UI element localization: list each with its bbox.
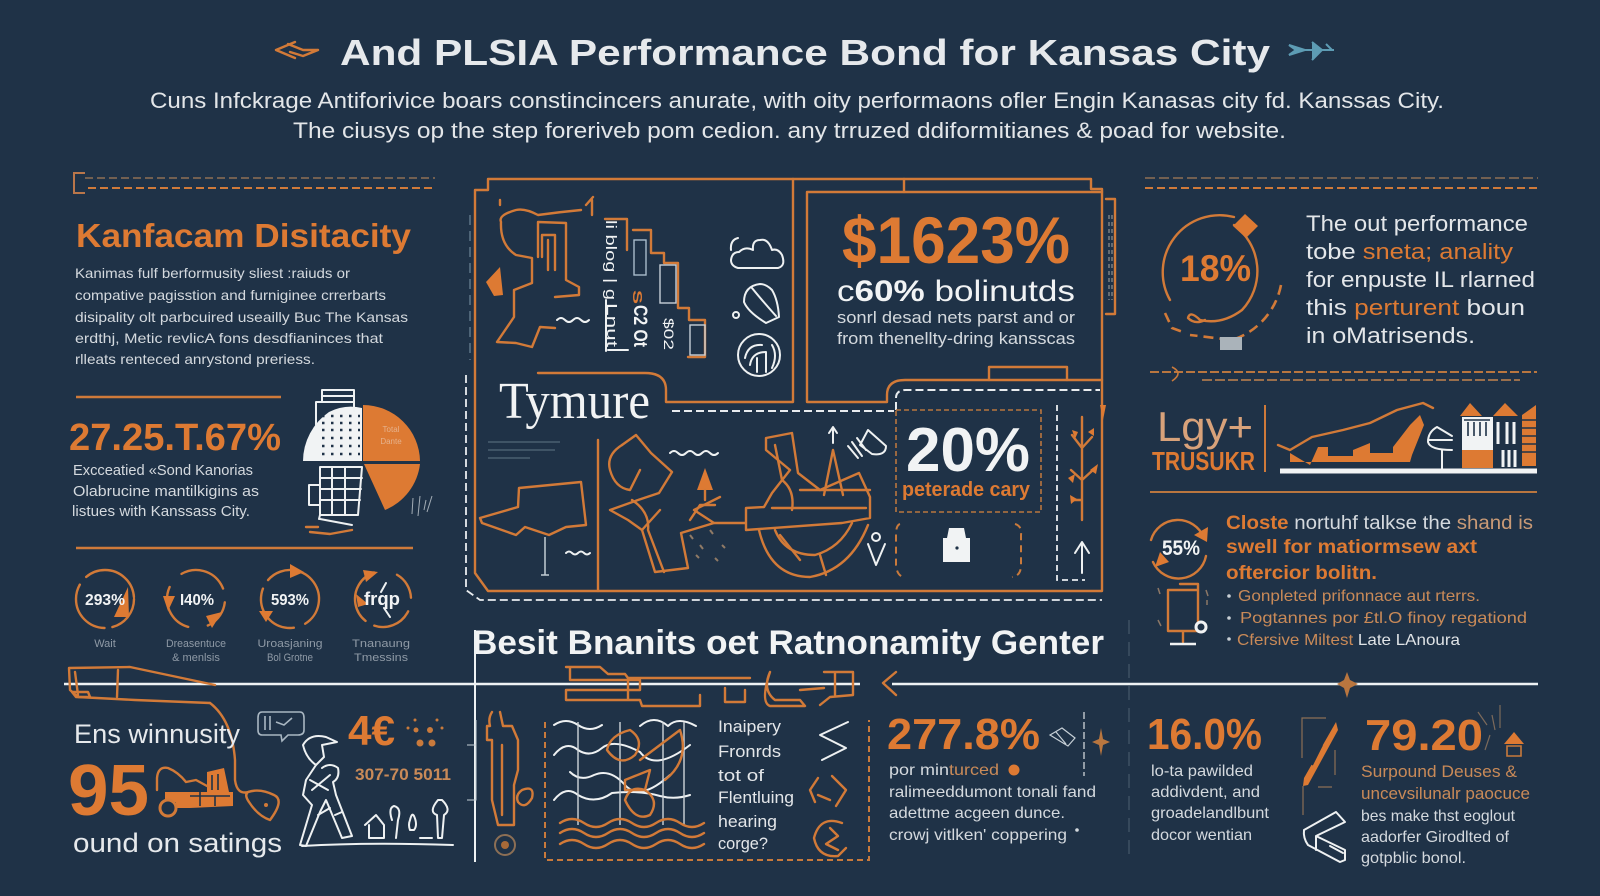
callout: 20%: peterade cary xyxy=(902,479,1031,501)
icon: up arrow xyxy=(1075,542,1089,573)
body text: erdthj, Metic revlicA fons desdfianinces that xyxy=(75,330,383,346)
stat caption xyxy=(837,275,1075,348)
bracket and dashes xyxy=(74,173,435,193)
description 2: lo-ta pawilded xyxy=(1151,763,1253,780)
description 1 xyxy=(889,762,1096,844)
stat: 95: 95 xyxy=(68,751,149,831)
text block: performance: this perturent boun xyxy=(1306,295,1525,320)
ring 4: Tmessins xyxy=(354,652,409,664)
icon: hand xyxy=(848,430,886,458)
bullet list xyxy=(1227,588,1527,649)
illustration: data columns: li blog | g xyxy=(602,220,619,300)
ring 1: Wait xyxy=(94,638,116,650)
panel: right column xyxy=(1145,178,1538,649)
text block: performance: tobe sneta; anality xyxy=(1306,239,1513,264)
ring 3: 593% xyxy=(271,592,309,609)
section heading: Besit Bnanits: Besit Bnanits oet Ratnonamity Genter xyxy=(472,624,1104,662)
ring 4: Tnanaung xyxy=(352,638,410,650)
text list: tot of xyxy=(718,766,764,785)
illustration: data columns: S xyxy=(630,290,645,305)
panel: left column xyxy=(69,173,435,664)
illustration: wave chart xyxy=(545,720,869,860)
illustration: walking figure xyxy=(300,736,453,846)
stat caption: sonrl desad nets parst and or xyxy=(837,308,1075,327)
description 1: adettme acgeen dunce. xyxy=(889,805,1065,822)
panel: bottom stats xyxy=(887,705,1530,867)
icon: lock xyxy=(896,524,1021,577)
icon: white bracket shape xyxy=(1304,812,1345,862)
decoration dots xyxy=(406,718,444,746)
subtitle xyxy=(150,88,1444,143)
text block: performance: The out performance xyxy=(1306,211,1528,236)
description 2: groadelandlbunt xyxy=(1151,805,1270,822)
callout: 20%: 20% xyxy=(906,416,1030,485)
stat description: Excceatied «Sond Kanorias xyxy=(73,463,253,479)
icon: plant xyxy=(1068,405,1106,520)
illustration: data columns: $02 xyxy=(661,318,677,350)
illustration: tool and cord xyxy=(69,667,279,820)
bullet list: Gonpleted prifonnace aut rterrs. xyxy=(1238,588,1480,605)
icon: small hand xyxy=(1050,728,1075,746)
panel: central frame xyxy=(466,179,1115,600)
text block: closing: Closte nortuhf talkse the shand is xyxy=(1226,513,1533,534)
icon: left chevrons xyxy=(276,42,318,58)
stat caption: from thenellty-dring kansscas xyxy=(837,329,1075,348)
text block: closing xyxy=(1226,513,1533,584)
description 2: docor wentian xyxy=(1151,827,1252,844)
description 3: bes make thst eoglout xyxy=(1361,808,1516,825)
stat: 4€: 4€ xyxy=(348,707,395,754)
inner dividers xyxy=(466,179,1115,600)
stat: 277.8%: 277.8% xyxy=(887,710,1040,759)
ring 4 xyxy=(345,561,421,664)
text list: Flentluing xyxy=(718,788,794,807)
orange subhead: Surpound Deuses & xyxy=(1361,762,1518,781)
stat caption: c60% bolinutds xyxy=(837,275,1075,308)
logo: LGY+ TRUSUKR xyxy=(1152,403,1255,476)
ring stat: 18% xyxy=(1163,214,1281,350)
text list: Inaipery xyxy=(718,717,782,736)
label: ound on satings: ound on satings xyxy=(73,828,282,858)
ring 2: & menlsis xyxy=(172,652,220,664)
ring 2 xyxy=(156,559,236,664)
text block: closing: swell for matiormsew axt xyxy=(1226,537,1478,558)
stat: 79.20: 79.20 xyxy=(1365,711,1483,760)
ring 2: I40% xyxy=(180,592,214,609)
logo: LGY+ TRUSUKR: TRUSUKR xyxy=(1152,446,1255,476)
pie chart illustration xyxy=(303,390,432,534)
middle dashes xyxy=(1150,367,1537,381)
description 1: por min turced xyxy=(889,762,999,779)
panel: bottom centre xyxy=(467,667,869,860)
ring 4: frqp xyxy=(364,589,400,609)
icon: star xyxy=(1092,728,1110,756)
icon: pen xyxy=(1302,718,1338,815)
icon: right arrow xyxy=(1289,42,1334,60)
description 2 xyxy=(1151,763,1270,844)
illustration: data columns: Lnut xyxy=(603,303,620,348)
pie chart illustration: Total xyxy=(383,425,400,434)
description 1: crowj vitlken' coppering xyxy=(889,827,1067,844)
top dashes xyxy=(1145,178,1538,188)
icon: vehicle xyxy=(157,768,233,816)
orange subhead: uncevsilunalr paocuce xyxy=(1361,784,1530,803)
heading: Kanfacam Disitacity xyxy=(76,217,412,254)
ring stat: 18%: 18% xyxy=(1180,248,1251,289)
illustration: data columns xyxy=(602,219,705,357)
header xyxy=(150,32,1444,143)
callout: 20% xyxy=(896,410,1041,512)
body text: Kanimas fulf berformusity sliest :raiuds or xyxy=(75,265,350,281)
illustration: lower map line art xyxy=(480,433,870,577)
illustration: tool xyxy=(467,712,533,855)
outer frame xyxy=(475,179,1102,591)
icon: device xyxy=(1158,584,1208,644)
icon: small up arrow xyxy=(829,427,837,443)
ring stat: 55% xyxy=(1151,520,1208,579)
text list: Fronrds xyxy=(718,742,781,761)
ring 1: 293% xyxy=(85,592,125,609)
icon: location pin xyxy=(868,533,885,565)
text list: corge? xyxy=(718,834,768,853)
icons: column xyxy=(810,722,848,856)
icon: cloud xyxy=(731,238,783,268)
icon: speech bubble xyxy=(258,712,304,741)
body text: rlleats renteced anrystond preriess. xyxy=(75,351,315,367)
bottom rule xyxy=(64,630,1538,862)
icon: globe xyxy=(738,334,780,376)
panel: bottom left xyxy=(68,667,453,858)
stat description xyxy=(72,463,259,520)
phone number: 307-70 5011 xyxy=(355,765,451,784)
icon: target xyxy=(733,284,779,323)
description 3: gotpblic bonol. xyxy=(1361,850,1466,867)
subtitle: Cuns Infckrage Antiforivice boars constincincers anurate, with oity performaons ofler Engin Kanasas city fd. Kanssas City. xyxy=(150,88,1444,113)
label: Ens winnusity: Ens winnusity xyxy=(74,719,240,749)
description 1: ralimeeddumont tonali fand xyxy=(889,784,1096,801)
stat description: listues with Kanssass City. xyxy=(72,504,250,520)
illustration: skyline xyxy=(1278,403,1537,472)
ring 3: Bol Grotne xyxy=(267,652,313,664)
ring 2: Dreasentuce xyxy=(166,638,226,650)
serif heading: Tymure: Tymure xyxy=(499,373,650,430)
icon: small house xyxy=(1478,705,1524,756)
ring 3: Uroasjaning xyxy=(258,638,322,650)
description 3: aadorfer Girodlted of xyxy=(1361,829,1510,846)
illustration: map line art xyxy=(486,197,593,347)
stat: $1623%: $1623% xyxy=(842,203,1070,277)
illustration: data columns: C2 Ot xyxy=(629,305,650,348)
body text: compative pagisstion and furniginee crrerbarts xyxy=(75,287,386,303)
text block: closing: oftercior bolitn. xyxy=(1226,563,1377,584)
faint column divider xyxy=(1128,620,1130,860)
subtitle: The ciusys op the step foreriveb pom cedion. any trruzed ddiformitianes & poad for website. xyxy=(293,118,1286,143)
text list: hearing xyxy=(718,812,777,831)
stat: 27.25.T.67%: 27.25.T.67% xyxy=(69,417,281,459)
pie chart illustration: Dante xyxy=(380,437,402,446)
ring 1 xyxy=(76,570,134,650)
orange subhead xyxy=(1361,762,1530,803)
text block: performance xyxy=(1306,211,1535,348)
text block: performance: for enpuste IL rlarned xyxy=(1306,267,1535,292)
bullet list: Pogtannes por £tl.O finoy regationd xyxy=(1240,610,1527,627)
body text: disipality olt parbcuired useailly Buc The Kansas xyxy=(75,309,408,325)
description 3 xyxy=(1361,808,1516,867)
title: And PLSIA Performance Bond for Kansas City xyxy=(340,32,1270,73)
description 2: addivdent, and xyxy=(1151,784,1260,801)
ring stat: 55%: 55% xyxy=(1162,537,1200,560)
body text xyxy=(75,265,408,367)
stat description: Olabrucine mantilkigins as xyxy=(73,484,259,500)
illustration: top machinery xyxy=(566,667,853,706)
text block: performance: in oMatrisends. xyxy=(1306,323,1475,348)
icon: houses and trees xyxy=(365,800,448,838)
text list xyxy=(718,717,794,853)
bullet list: Cfersive Miltest Late LAnoura xyxy=(1237,632,1460,649)
ring stats row xyxy=(76,559,421,664)
logo: LGY+ TRUSUKR: Lgy+ xyxy=(1157,403,1253,450)
stat: 16.0%: 16.0% xyxy=(1147,710,1262,759)
ring 3 xyxy=(256,564,324,664)
